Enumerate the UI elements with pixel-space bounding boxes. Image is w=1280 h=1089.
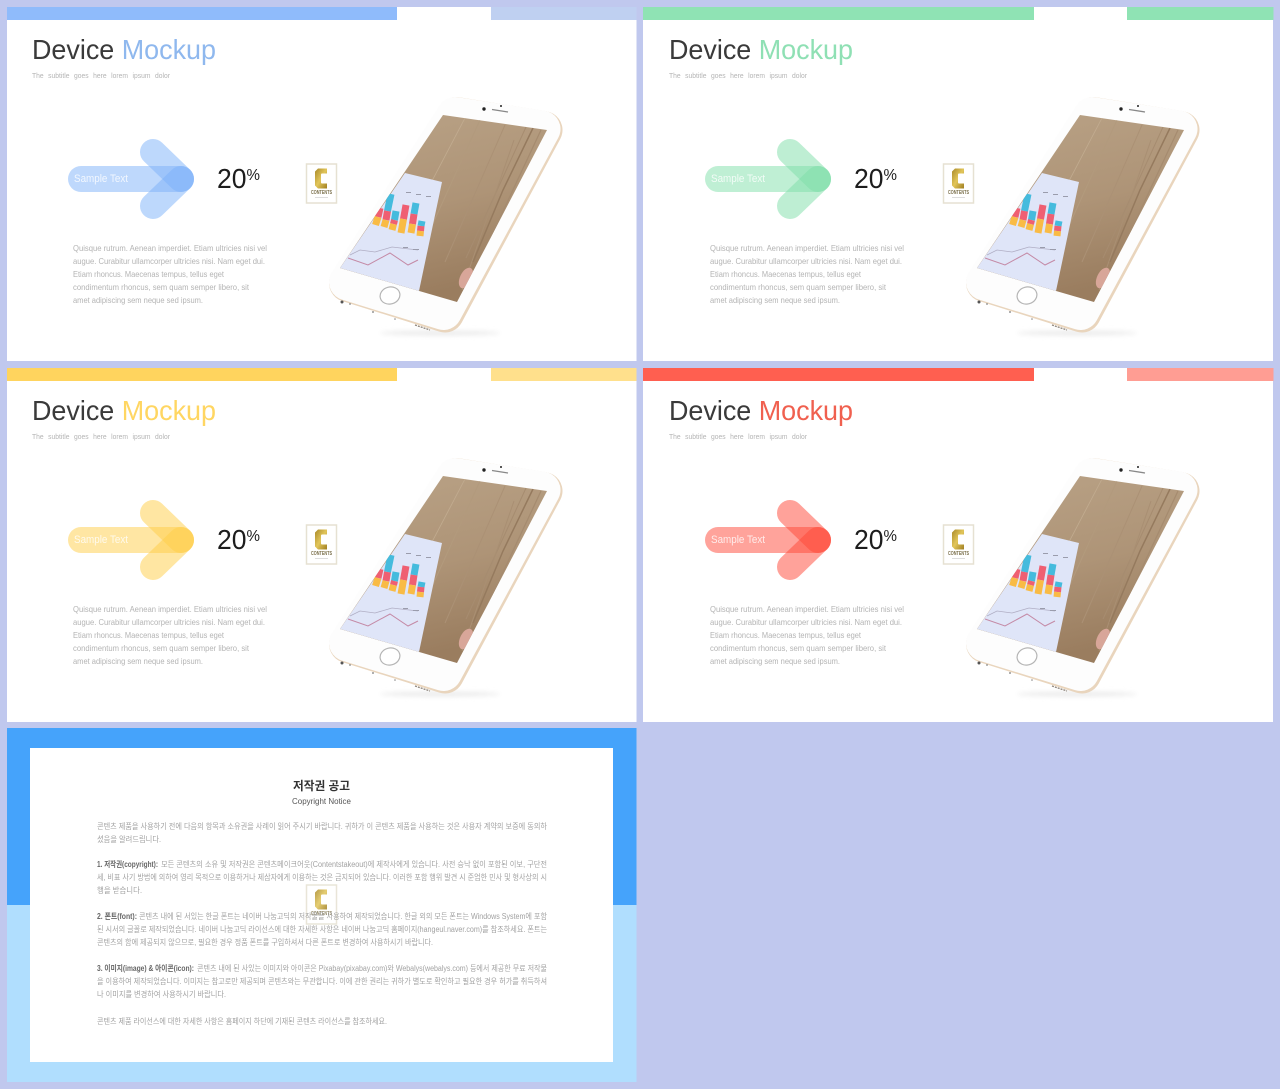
percentage: % (247, 167, 260, 184)
subtitle: The subtitle goes here lorem ipsum dolor (32, 432, 170, 441)
notice body text: 모든 콘텐츠의 소유 및 저작권은 콘텐츠메이크어웃(Contentstakeout)에 제작사에게 있습니다. 사전 승낙 없이 포함된 이보, 구단전 (161, 859, 547, 869)
body text: Etiam rhoncus. Maecenas tempus, tellus eget (710, 269, 862, 279)
percentage: 20 (854, 524, 885, 555)
title: Device Mockup (32, 34, 216, 65)
logo: CONTENTS (948, 551, 970, 557)
body text: amet adipiscing sem neque sed ipsum. (73, 656, 203, 666)
logo (944, 525, 974, 564)
notice body text: 콘텐츠 제품을 사용하기 전에 다음의 항목과 소유권을 사례이 읽어 주시기 바랍니다. 귀하가 이 콘텐츠 제품을 사용하는 것은 사용자 계약의 보증에 동의하 (97, 821, 548, 831)
top bar: blue (7, 7, 636, 20)
percentage: 20 (217, 163, 248, 194)
arrow label: Sample Text (711, 534, 765, 546)
percentage: % (884, 528, 897, 545)
notice body text: 콘텐츠 내에 된 사있는 이미지와 아이콘은 Pixabay(pixabay.com)와 Webalys(webalys.com) 등에서 제공한 무료 저작물 (197, 963, 547, 973)
logo (306, 164, 336, 203)
body text: condimentum rhoncus, sem quam semper libero, sit (710, 282, 887, 292)
notice body text: 세, 비표 사기 방법에 의하여 영리 목적으로 이용하거나 제삼자에게 이용하는 것은 금지되어 있습니다. 이러한 포함 행위 발견 시 준엄한 민사 및 형사상의 시 (97, 872, 547, 882)
body text: amet adipiscing sem neque sed ipsum. (73, 295, 203, 305)
arrow graphic (68, 152, 194, 206)
percentage: 20 (217, 524, 248, 555)
subtitle: The subtitle goes here lorem ipsum dolor (669, 71, 807, 80)
notice body text: 을 이용하여 제작되었습니다. 이미지는 참고로만 제공되며 콘텐츠와는 무관합니다. 이에 관한 권리는 귀하가 별도로 확인하고 필요한 경우 허가를 취득하셔 (97, 976, 547, 986)
body text: Etiam rhoncus. Maecenas tempus, tellus eget (73, 630, 225, 640)
body text: augue. Curabitur ullamcorper ultricies nisi. Nam eget dui. (73, 256, 265, 266)
arrow graphic (705, 513, 831, 567)
body text: augue. Curabitur ullamcorper ultricies nisi. Nam eget dui. (73, 617, 265, 627)
arrow label: Sample Text (74, 173, 128, 185)
phone mockup (977, 466, 1184, 696)
notice subheading: Copyright Notice (292, 796, 351, 806)
notice logo: CONTENTS (311, 911, 333, 917)
notice heading: 저작권 공고 (293, 778, 350, 793)
notice body text: 2. 폰트(font): (97, 912, 137, 921)
panel: slide green (643, 7, 1274, 361)
arrow label: Sample Text (74, 534, 128, 546)
notice body text: 1. 저작권(copyright): (97, 859, 158, 869)
notice body text: 행을 받습니다. (97, 885, 142, 895)
notice body text: 셨음을 알려드립니다. (97, 834, 161, 844)
body text: Quisque rutrum. Aenean imperdiet. Etiam ultricies nisi vel (73, 604, 267, 614)
arrow graphic (705, 152, 831, 206)
panel: slide red (643, 368, 1274, 722)
percentage: % (884, 167, 897, 184)
top bar: yellow (7, 368, 636, 381)
top bar: green (643, 7, 1274, 20)
body text: Etiam rhoncus. Maecenas tempus, tellus eget (710, 630, 862, 640)
notice body text: 3. 이미지(image) & 아이콘(icon): (97, 963, 194, 973)
body text (710, 604, 904, 666)
phone mockup (340, 466, 547, 696)
logo: CONTENTS (948, 190, 970, 196)
body text (73, 604, 267, 666)
body text: augue. Curabitur ullamcorper ultricies nisi. Nam eget dui. (710, 256, 902, 266)
notice body text: 콘텐츠의 함에 제공되지 않으므로, 필요한 경우 정품 폰트를 구입하셔서 다른 폰트로 변경하여 사용하시기 바랍니다. (97, 937, 433, 947)
subtitle: The subtitle goes here lorem ipsum dolor (669, 432, 807, 441)
notice body text: 나 이미지를 변경하여 사용하시기 바랍니다. (97, 989, 226, 999)
logo (306, 525, 336, 564)
notice body text: 콘텐츠 내에 된 서있는 한글 폰트는 네이버 나눔고딕의 저작물을 사용하여 제작되었습니다. 한글 외의 모든 폰트는 Windows System에 포함 (139, 911, 548, 921)
panel: copyright notice (7, 728, 636, 1082)
arrow label: Sample Text (711, 173, 765, 185)
logo: CONTENTS (311, 551, 333, 557)
phone mockup (977, 105, 1184, 336)
body text: Quisque rutrum. Aenean imperdiet. Etiam ultricies nisi vel (710, 604, 904, 614)
body text (73, 243, 267, 305)
title: Device Mockup (32, 395, 216, 426)
body text: Quisque rutrum. Aenean imperdiet. Etiam ultricies nisi vel (73, 243, 267, 253)
notice body text: 된 시서의 글꼴로 제작되었습니다. 네이버 나눔고딕 라이선스에 대한 자세한 사항은 네이버 나눔고딕 홈페이지(hangeul.naver.com)를 참조하세요. 폰트는 (97, 924, 547, 934)
percentage: 20 (854, 163, 885, 194)
body text: augue. Curabitur ullamcorper ultricies nisi. Nam eget dui. (710, 617, 902, 627)
subtitle: The subtitle goes here lorem ipsum dolor (32, 71, 170, 80)
body text: amet adipiscing sem neque sed ipsum. (710, 656, 840, 666)
body text: condimentum rhoncus, sem quam semper libero, sit (710, 643, 887, 653)
panel: slide blue (7, 7, 636, 361)
title: Device Mockup (669, 395, 853, 426)
body text: condimentum rhoncus, sem quam semper libero, sit (73, 643, 250, 653)
body text (710, 243, 904, 305)
body text: Quisque rutrum. Aenean imperdiet. Etiam ultricies nisi vel (710, 243, 904, 253)
arrow graphic (68, 513, 194, 567)
notice body text: 콘텐츠 제품 라이선스에 대한 자세한 사항은 홈페이지 하단에 기재된 콘텐츠 라이선스를 참조하세요. (97, 1016, 387, 1026)
logo (944, 164, 974, 203)
body text: condimentum rhoncus, sem quam semper libero, sit (73, 282, 250, 292)
body text: Etiam rhoncus. Maecenas tempus, tellus eget (73, 269, 225, 279)
percentage: % (247, 528, 260, 545)
top bar: red (643, 368, 1274, 381)
notice body text (97, 821, 548, 1026)
title: Device Mockup (669, 34, 853, 65)
notice logo (306, 885, 336, 924)
phone mockup (340, 105, 547, 336)
body text: amet adipiscing sem neque sed ipsum. (710, 295, 840, 305)
panel: slide yellow (7, 368, 636, 722)
logo: CONTENTS (311, 190, 333, 196)
